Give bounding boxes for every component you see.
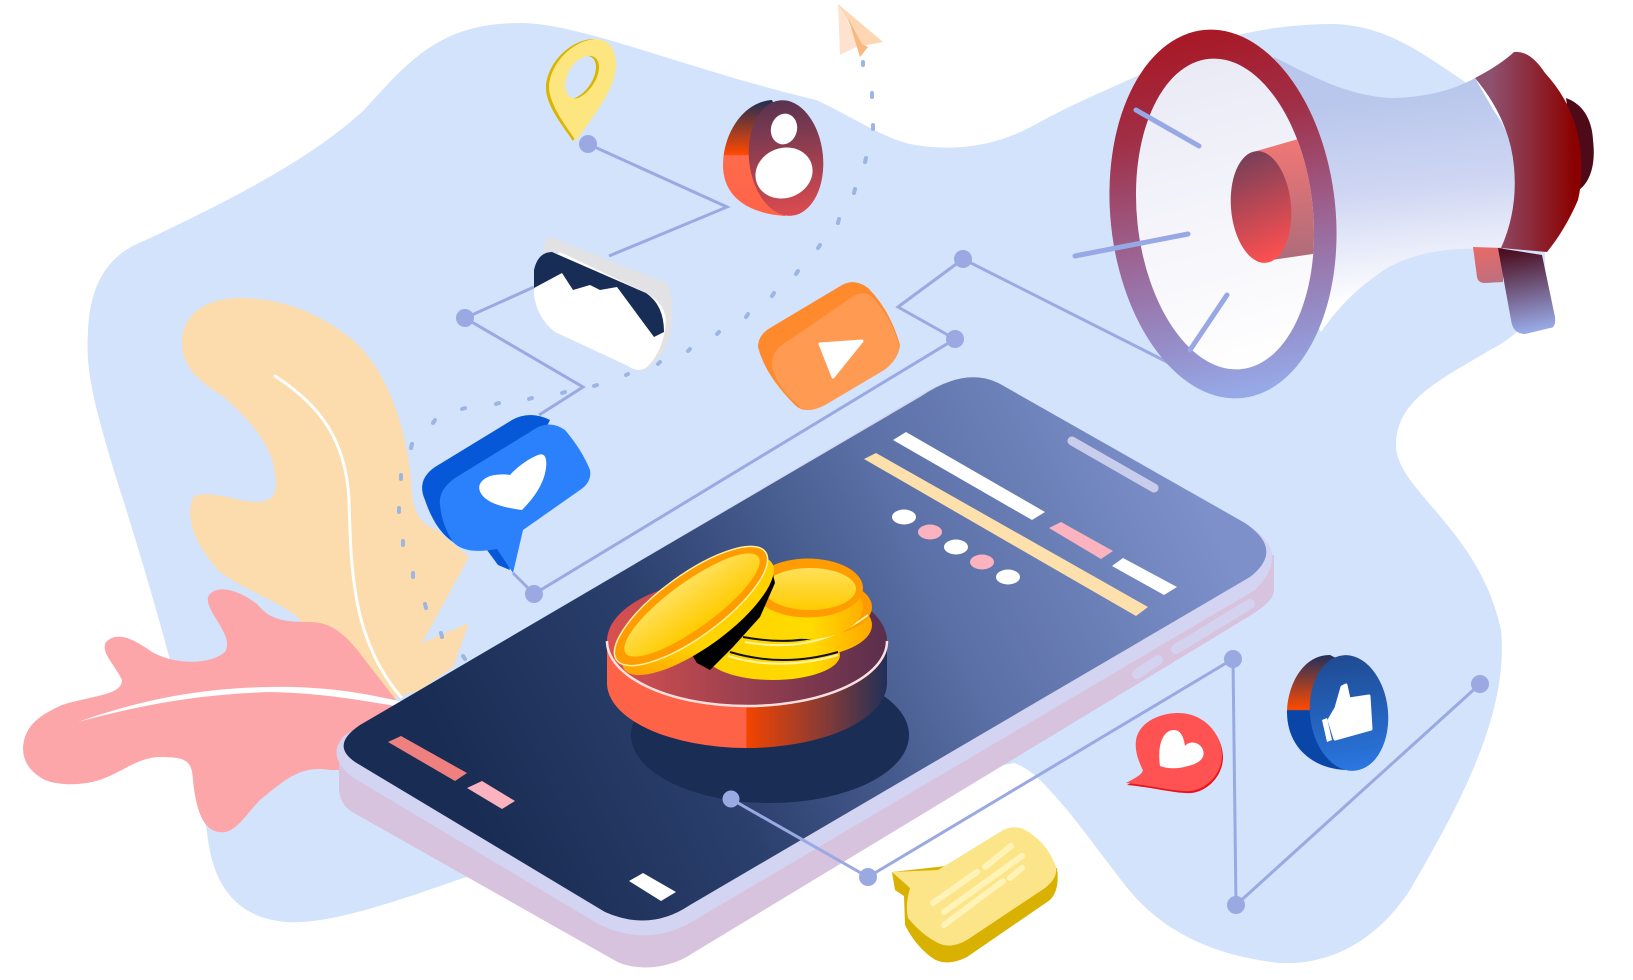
- coin stack on platform: [598, 527, 909, 803]
- person head: [767, 111, 801, 147]
- chat text lines: [933, 846, 1022, 925]
- megaphone: [1075, 18, 1594, 410]
- cuff: [1322, 718, 1332, 742]
- top coin: [753, 558, 863, 639]
- pink bar: [1049, 522, 1113, 559]
- icon: image card: [534, 238, 672, 370]
- phone screen: [344, 377, 1266, 921]
- megaphone rear knob: [1566, 98, 1594, 190]
- sound lines: [1075, 110, 1227, 350]
- bottom white bar: [629, 873, 676, 901]
- phone: [336, 377, 1274, 967]
- icon: red heart bubble: [1126, 713, 1223, 793]
- platform rim: [607, 641, 887, 706]
- speaker cylinder: [1230, 139, 1314, 263]
- phone side body: [339, 555, 1274, 967]
- thumb: [1329, 685, 1371, 739]
- dotted flight path: [399, 62, 873, 659]
- side buttons: [1137, 604, 1250, 674]
- megaphone rear cap: [1475, 52, 1582, 252]
- tilted coin: [598, 527, 790, 695]
- icon: chat bubble: [892, 827, 1058, 962]
- line to chat bubble and nodes: [731, 659, 1480, 905]
- play triangle: [820, 341, 862, 377]
- bottom coin: [706, 630, 840, 680]
- platform side: [607, 641, 887, 748]
- top speaker pill: [1072, 441, 1154, 488]
- megaphone ring: [1092, 18, 1354, 410]
- dots row: [892, 510, 1020, 584]
- megaphone cone: [1121, 50, 1329, 378]
- orange leaf: [182, 298, 469, 698]
- icon: thumbs up badge: [1287, 651, 1394, 775]
- handle: [1498, 248, 1555, 334]
- icon: location pin: [546, 39, 616, 141]
- icon: blue heart bubble: [422, 415, 590, 573]
- node dots: [456, 135, 1489, 914]
- pink leaf vein: [78, 687, 403, 722]
- icon: paper plane: [838, 4, 883, 57]
- white short bar: [1112, 558, 1177, 595]
- orange leaf vein: [275, 376, 401, 697]
- middle coin: [728, 578, 872, 664]
- heart: [1159, 730, 1204, 768]
- pink leaf: [23, 589, 420, 832]
- icon: person badge: [723, 96, 829, 220]
- phone bezel: [336, 379, 1272, 935]
- icon: play button: [758, 282, 900, 410]
- bottom left red bar: [388, 736, 467, 781]
- coin shadow: [692, 570, 775, 670]
- cream bar: [864, 453, 1148, 616]
- heart: [479, 454, 546, 510]
- connector lines: [465, 144, 1175, 594]
- platform top: [607, 576, 887, 706]
- platform shadow: [631, 667, 909, 803]
- person body: [748, 140, 820, 206]
- white bar: [893, 432, 1045, 520]
- megaphone body: [1250, 57, 1525, 332]
- clip: [1473, 247, 1503, 283]
- bottom left pink bar: [467, 781, 515, 809]
